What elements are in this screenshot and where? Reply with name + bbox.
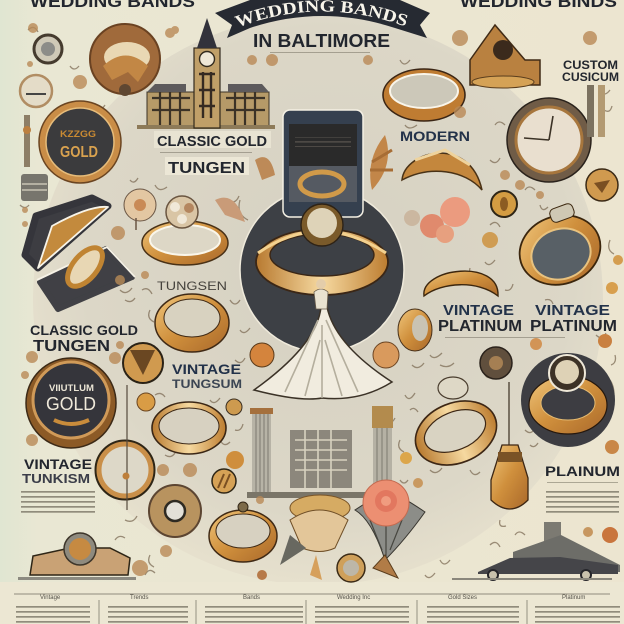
heading: vintage tunkism: TUNKISM xyxy=(22,471,90,486)
heading: vintage tunkism xyxy=(22,456,92,486)
central office building xyxy=(247,430,379,498)
gold lantern xyxy=(491,382,528,509)
small gauge left xyxy=(20,75,52,107)
right column xyxy=(372,406,393,498)
heading: modern: MODERN xyxy=(400,128,470,144)
gold crown piece xyxy=(402,150,482,190)
small compass top left xyxy=(34,35,62,63)
clock tower building xyxy=(137,18,275,129)
heading: classic gold tungen left xyxy=(30,322,138,355)
crest: knight emblem top right xyxy=(470,25,540,88)
small diamond pin xyxy=(337,554,365,582)
gold clasp xyxy=(398,309,432,351)
peach flowers xyxy=(404,197,498,248)
salmon rose xyxy=(355,480,425,560)
heading: custom xyxy=(562,60,619,84)
bottom column: one: Vintage xyxy=(40,595,61,601)
bottom column: one xyxy=(16,595,90,624)
heading: classic gold tungen left: TUNGEN xyxy=(33,338,110,355)
bottom dividers xyxy=(14,594,610,624)
heading: vintage platinum pair: PLATINUM xyxy=(530,318,617,335)
bottom column: six xyxy=(535,595,620,624)
wide signet ring bottom left xyxy=(18,533,136,580)
small gold coin xyxy=(250,343,274,367)
heading: vintage platinum pair: VINTAGE xyxy=(443,303,514,319)
engraved ring right xyxy=(511,202,609,295)
heading: classic gold: CLASSIC GOLD xyxy=(157,134,267,150)
bottom column: two: Trends xyxy=(130,595,148,601)
heading: custom: CUSICUM xyxy=(562,72,619,84)
heading: vintage tungsum xyxy=(172,361,242,396)
bottom column: four: Wedding Inc xyxy=(337,595,370,601)
heading: custom: CUSTOM xyxy=(563,60,618,72)
gold seal badge xyxy=(39,101,121,183)
small coins row xyxy=(137,393,244,469)
floral diamond brooch xyxy=(149,485,201,537)
vintage gold seal: GOLD xyxy=(46,394,96,414)
heading: vintage platinum pair xyxy=(438,303,617,340)
skyline and car xyxy=(452,522,620,580)
ribbon of floral scraps centre left xyxy=(215,157,275,222)
open ring box left xyxy=(25,198,135,309)
bottom column: five: Gold Sizes xyxy=(448,595,477,601)
small gold coin xyxy=(491,191,517,217)
central dark disc xyxy=(240,188,404,352)
diamond ring on dark disc xyxy=(521,353,615,447)
heading: top right wedding binds xyxy=(460,0,617,16)
ring centre left xyxy=(152,402,226,454)
small scraps near rose xyxy=(257,555,398,580)
heading: vintage tunkism: VINTAGE xyxy=(24,456,92,472)
title ribbon xyxy=(215,0,430,53)
top centre ring xyxy=(383,69,465,121)
heading: vintage tungsum: TUNGSUM xyxy=(172,377,242,391)
heading: tungen xyxy=(165,157,255,181)
heading: classic gold tungen left: CLASSIC GOLD xyxy=(30,322,138,338)
pocket watch xyxy=(507,98,591,182)
heading: classic gold xyxy=(154,131,271,155)
ring bottom centre xyxy=(209,502,277,562)
tall bars top right xyxy=(587,85,605,137)
pendant ring xyxy=(98,385,152,510)
orange bead xyxy=(373,342,399,368)
ring with diamond cluster xyxy=(142,196,228,265)
vintage gold seal xyxy=(26,358,116,448)
bottom column: two xyxy=(108,595,188,624)
open jewellery box centre xyxy=(283,110,363,217)
small box left xyxy=(21,174,48,201)
medallion: brown crest top left xyxy=(90,24,160,96)
bottom column: five xyxy=(427,595,519,624)
bride dress xyxy=(254,279,392,399)
heading: vintage platinum pair: VINTAGE xyxy=(535,303,610,319)
left bars and figure doodle xyxy=(23,115,31,167)
bottom column: three xyxy=(205,595,303,624)
autumn leaves xyxy=(370,135,393,190)
gold seal badge: GOLD xyxy=(60,144,98,161)
left column xyxy=(250,408,273,494)
ring left middle xyxy=(155,294,229,352)
heading: tungen: TUNGEN xyxy=(168,160,245,177)
bottom column: four xyxy=(315,595,409,624)
bottom column: six: Platinum xyxy=(562,595,585,601)
heading: vintage platinum pair: PLATINUM xyxy=(438,318,522,335)
gold ring right of central xyxy=(424,271,498,296)
bottom column: three: Bands xyxy=(243,595,260,601)
vintage gold seal: VIIUTLUM xyxy=(49,383,94,393)
heading: small tungsen: TUNGSEN xyxy=(157,281,227,293)
heading: top left wedding bands xyxy=(28,0,198,16)
title ribbon: IN BALTIMORE xyxy=(253,31,390,51)
central gold ring xyxy=(256,204,388,295)
gold seal badge: KZZGG xyxy=(60,129,96,139)
gold medallion diagonal xyxy=(212,469,236,493)
heading: plainum: PLAINUM xyxy=(545,464,620,479)
small beads right xyxy=(400,255,623,543)
two tone diamond ring xyxy=(406,377,506,477)
text block left xyxy=(21,488,95,516)
gold medallion right xyxy=(586,169,618,201)
medallion small xyxy=(123,343,163,383)
pearl brooch xyxy=(124,189,156,230)
heading: vintage tungsum: VINTAGE xyxy=(172,361,241,377)
gold flower xyxy=(280,495,350,565)
dark coin xyxy=(480,347,512,379)
text block right xyxy=(546,482,619,514)
